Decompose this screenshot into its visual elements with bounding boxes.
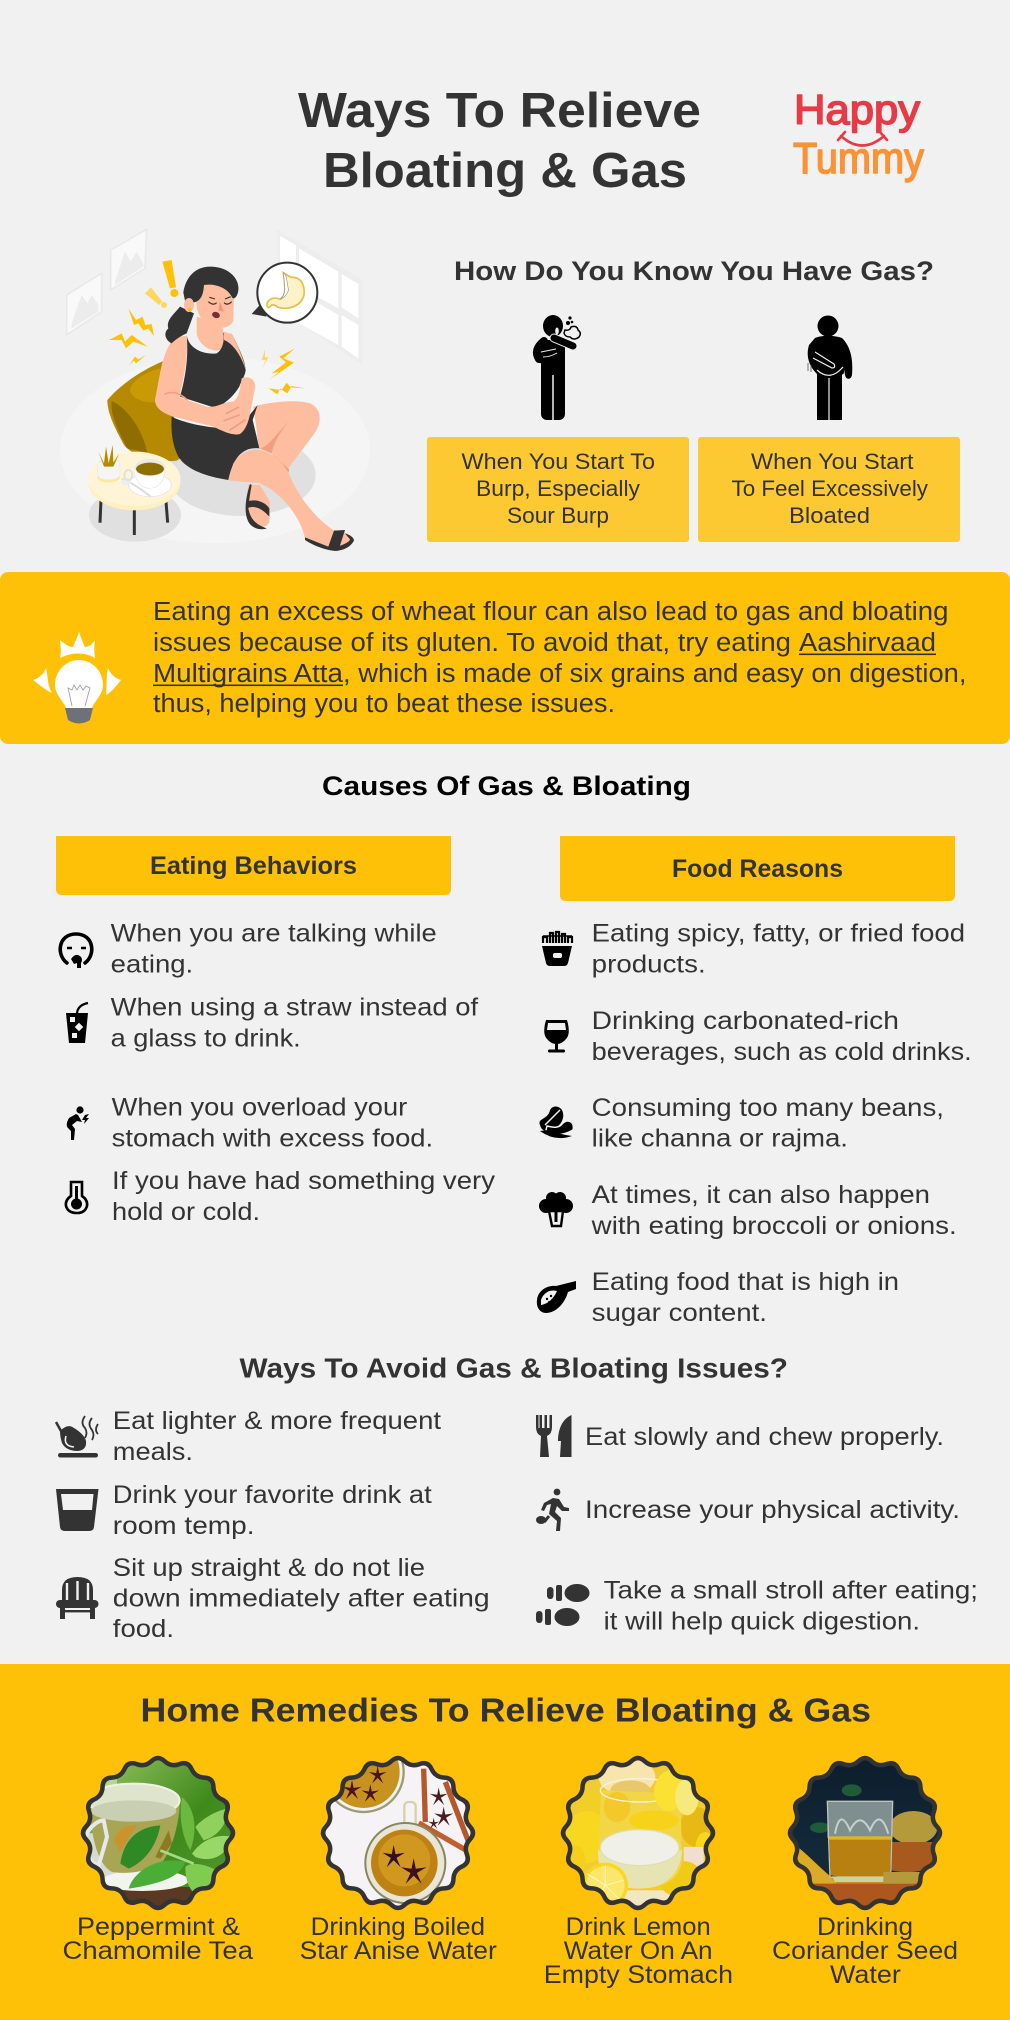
remedy: star anise water: Star Anise Water	[300, 1937, 497, 1965]
remedy: lemon water: Drink Lemon	[566, 1913, 711, 1941]
callout text: thus, helping you to beat these issues.	[153, 690, 615, 718]
logo: Happy Tummy: Happy	[794, 86, 920, 133]
title	[298, 84, 701, 198]
item: beans	[539, 1094, 944, 1153]
icon: burping person	[537, 315, 580, 420]
title: Ways To Relieve	[298, 84, 701, 138]
item: carbonated drinks: Drinking carbonated-rich	[592, 1007, 899, 1035]
item: room temp drink: Drink your favorite drink at	[113, 1481, 432, 1509]
remedy: peppermint tea: Chamomile Tea	[62, 1937, 253, 1965]
card: bloated: Bloated	[789, 503, 870, 528]
item: sit straight: down immediately after eating	[113, 1585, 490, 1613]
item: overload stomach: stomach with excess food.	[112, 1125, 433, 1153]
remedy: coriander seed water: Coriander Seed	[772, 1937, 958, 1965]
card: burp	[427, 437, 689, 542]
item: overload stomach	[67, 1094, 433, 1153]
item: sit straight: food.	[113, 1615, 174, 1643]
item: beans: like channa or rajma.	[592, 1125, 848, 1153]
item: lighter meals: Eat lighter & more frequent	[113, 1407, 441, 1435]
item: fried food	[542, 920, 965, 979]
sub-heading button: Eating Behaviors	[150, 852, 357, 880]
illustration: woman with bloated stomach	[60, 229, 370, 551]
sub-heading button	[560, 836, 955, 901]
callout text: Eating an excess of wheat flour can also lead to gas and bloating	[153, 598, 948, 626]
card: burp: Sour Burp	[507, 503, 609, 528]
heading: How Do You Know You Have Gas?	[454, 256, 934, 286]
callout text: , which is made of six grains and easy on digestion,	[343, 660, 966, 688]
logo: Happy Tummy	[793, 86, 924, 183]
item: broccoli: At times, it can also happen	[592, 1181, 930, 1209]
heading: Ways To Avoid Gas & Bloating Issues?	[240, 1353, 788, 1384]
item: talking while eating: eating.	[111, 951, 193, 979]
item: eat slowly	[536, 1415, 944, 1457]
callout text	[153, 598, 966, 718]
item: physical activity	[536, 1489, 960, 1531]
remedy: peppermint tea	[62, 1750, 253, 1965]
heading: Home Remedies To Relieve Bloating & Gas	[140, 1693, 871, 1730]
item: room temp drink: room temp.	[113, 1512, 254, 1540]
icon: bloated person	[808, 316, 852, 420]
item: fried food: products.	[592, 951, 706, 979]
item: broccoli	[539, 1181, 957, 1240]
item: straw	[66, 994, 478, 1053]
remedy: peppermint tea: Peppermint &	[77, 1913, 240, 1941]
card: burp: Burp, Especially	[476, 476, 640, 501]
callout: wheat flour tip	[0, 572, 1010, 744]
item: lighter meals: meals.	[113, 1438, 193, 1466]
item: sugar: sugar content.	[592, 1299, 767, 1327]
callout text: Aashirvaad	[799, 629, 936, 657]
remedy: star anise water: Drinking Boiled	[311, 1913, 485, 1941]
panel: home remedies	[0, 1664, 1010, 2020]
item: beans: Consuming too many beans,	[592, 1094, 944, 1122]
item: broccoli: with eating broccoli or onions.	[591, 1212, 957, 1240]
item: carbonated drinks	[544, 1007, 972, 1066]
remedy: lemon water: Empty Stomach	[544, 1961, 733, 1989]
item: sugar: Eating food that is high in	[592, 1268, 899, 1296]
item: fried food: Eating spicy, fatty, or fried food	[592, 920, 965, 948]
card: bloated: When You Start	[751, 449, 914, 474]
card: bloated: To Feel Excessively	[732, 476, 928, 501]
item: talking while eating: When you are talking while	[111, 920, 437, 948]
item: straw: a glass to drink.	[111, 1025, 301, 1053]
item: eat slowly: Eat slowly and chew properly.	[585, 1423, 944, 1451]
item: hot or cold: hold or cold.	[112, 1198, 260, 1226]
callout text: Multigrains Atta	[153, 660, 344, 688]
remedy: lemon water: Water On An	[564, 1937, 713, 1965]
panel: eating behaviors	[56, 836, 496, 1226]
item: take a stroll: Take a small stroll after eating;	[604, 1577, 978, 1605]
item: physical activity: Increase your physical activity.	[585, 1496, 960, 1524]
item: carbonated drinks: beverages, such as cold drinks.	[592, 1038, 972, 1066]
icon: light bulb	[33, 632, 121, 724]
item: take a stroll: it will help quick digestion.	[604, 1608, 920, 1636]
item: hot or cold	[66, 1167, 496, 1226]
remedy: coriander seed water: Water	[830, 1961, 901, 1989]
item: hot or cold: If you have had something very	[112, 1167, 496, 1195]
sub-heading button: Food Reasons	[672, 855, 843, 883]
item: straw: When using a straw instead of	[111, 994, 478, 1022]
panel: food reasons	[537, 836, 972, 1327]
item: talking while eating	[60, 920, 437, 979]
item: sit straight: Sit up straight & do not lie	[113, 1554, 425, 1582]
item: take a stroll	[536, 1577, 978, 1636]
remedy: coriander seed water: Drinking	[817, 1913, 913, 1941]
item: sit straight	[56, 1554, 490, 1643]
panel: ways to avoid gas	[56, 1353, 978, 1643]
remedy: lemon water	[544, 1750, 733, 1989]
title: Bloating & Gas	[323, 144, 687, 198]
item: room temp drink	[56, 1481, 432, 1540]
heading: causes: Causes Of Gas & Bloating	[322, 771, 691, 801]
sub-heading button	[56, 836, 451, 895]
logo: Happy Tummy: Tummy	[793, 134, 924, 183]
remedy: star anise water	[300, 1756, 496, 1959]
callout text: issues because of its gluten. To avoid that, try eating	[153, 629, 791, 657]
item: lighter meals	[56, 1407, 441, 1466]
item: overload stomach: When you overload your	[112, 1094, 407, 1122]
panel: how do you know you have gas	[427, 256, 960, 542]
item: sugar	[537, 1268, 899, 1327]
remedy: coriander seed water	[772, 1750, 958, 1989]
card: burp: When You Start To	[462, 449, 655, 474]
card: bloated	[698, 437, 960, 542]
